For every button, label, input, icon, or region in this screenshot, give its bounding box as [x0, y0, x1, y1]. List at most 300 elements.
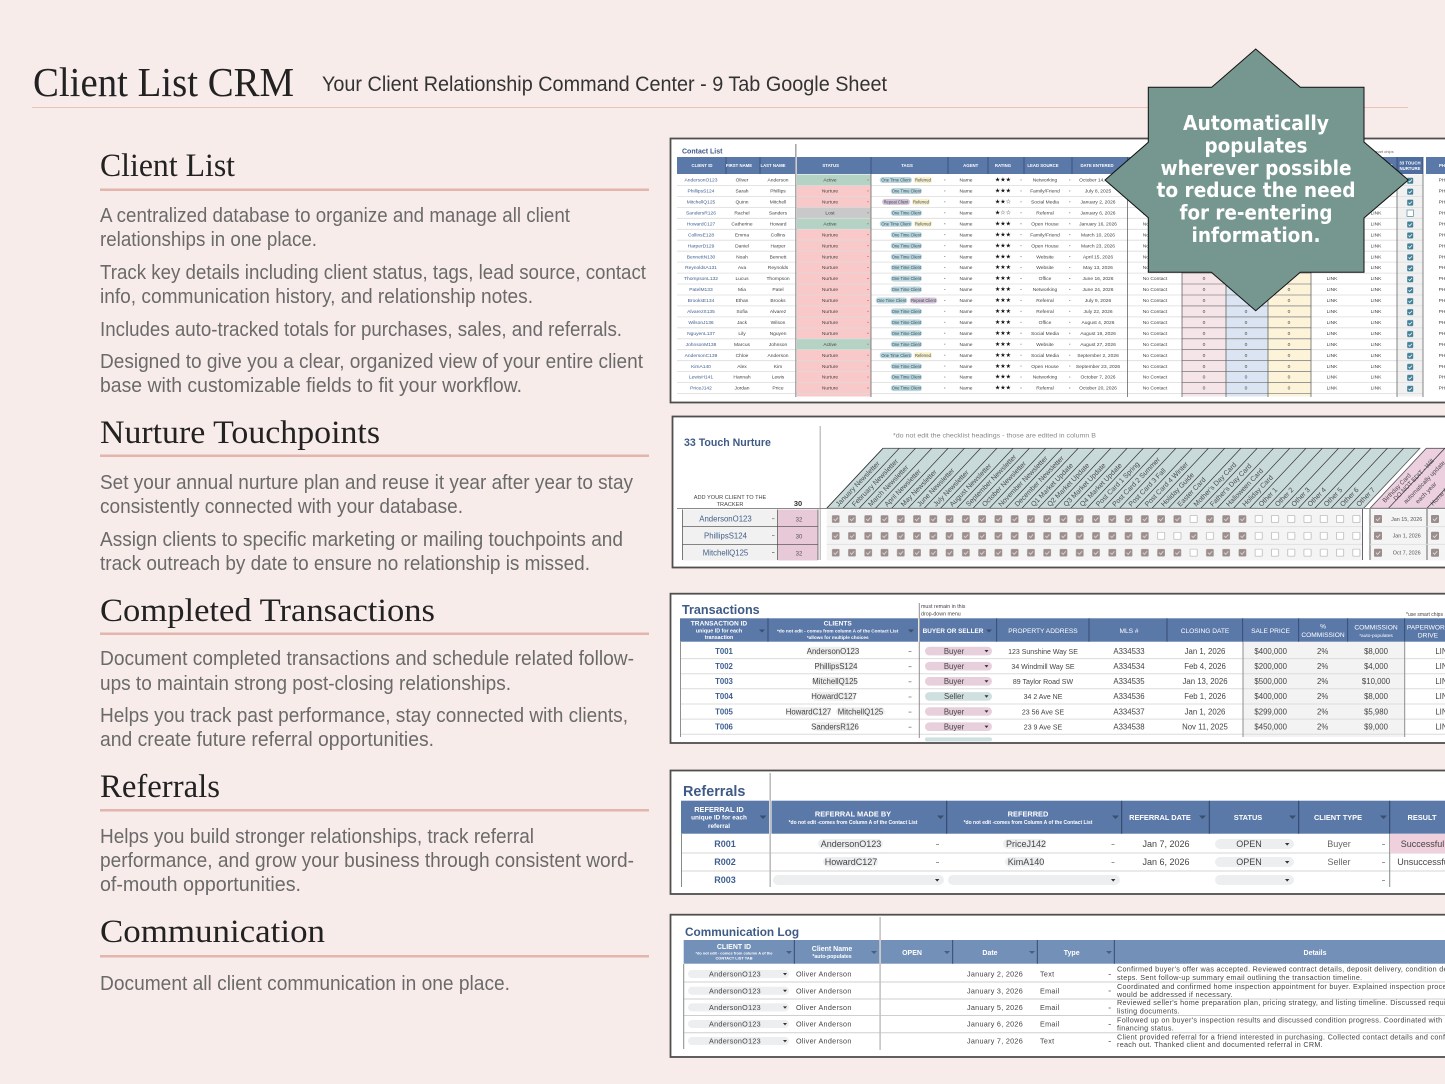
row: ReynoldsA131: ★★★ [995, 264, 1011, 271]
client pills [786, 647, 885, 731]
header row: *auto-populates [1359, 633, 1393, 639]
row: PhillipsS124: PhillipsS124 [688, 189, 715, 195]
slanted touchpoint labels: Other 1 [1258, 487, 1279, 508]
slanted touchpoint labels: Other 4 [1307, 487, 1328, 508]
row: T002: Feb 4, 2026 [1184, 662, 1226, 671]
row: BrooksE134: LINK [1327, 298, 1338, 304]
row: T002: $4,000 [1364, 662, 1389, 671]
frozen column divider [769, 773, 771, 887]
header row [677, 157, 1445, 174]
row: BrooksE134: Brooks [770, 298, 786, 304]
row: ThompsonL132: No Contact [1143, 276, 1168, 282]
header row: RATING [995, 163, 1012, 168]
header row: COMMISSION [1301, 632, 1345, 639]
slanted touchpoint labels: Other 2 [1274, 487, 1296, 508]
column dividers [871, 174, 1423, 397]
row: T001: $400,000 [1254, 647, 1288, 656]
row: T004: T004 [715, 692, 734, 701]
row: AndersonC139: LINK [1327, 353, 1338, 359]
row: ReynoldsA131: LINK [1327, 265, 1338, 271]
row: JohnsonM138: ★★★ [995, 341, 1011, 348]
row: HowardC127: Referred [915, 221, 932, 226]
header [32, 59, 1408, 108]
header row: REFERRAL MADE BY [815, 810, 891, 818]
row: MitchellQ125: ★★☆ [995, 198, 1011, 206]
slanted touchpoint labels: Holiday Card [1242, 474, 1275, 508]
row: JohnsonM138: 0 [1245, 342, 1248, 348]
row: PriceJ142: No Contact [1143, 386, 1168, 392]
body text: info, communication history, and relationship notes. [100, 286, 533, 308]
row: January 3: AndersonO123 [709, 986, 761, 995]
heading rule [100, 955, 649, 958]
row: CollinsE128: ★★★ [995, 231, 1011, 238]
body text: relationships in one place. [100, 229, 317, 251]
row: NguyenL137: NguyenL137 [687, 331, 715, 337]
row: ThompsonL132: LINK [1371, 276, 1382, 282]
row: January 3: January 3, 2026 [967, 986, 1023, 995]
row: WilsonJ136: No Contact [1143, 320, 1168, 326]
row: ThompsonL132: Lucus [735, 276, 749, 282]
row: ThompsonL132: Thompson [766, 276, 790, 282]
row: PatelM133: Mia [738, 287, 746, 293]
row: MitchellQ125: 0 [1203, 200, 1206, 206]
body text: ups to maintain strong post-closing relationships. [100, 673, 511, 695]
row: ThompsonL132: LINK [1327, 276, 1338, 282]
row: SandersR126: 0 [1288, 210, 1291, 216]
sheet title: Transactions: Transactions [682, 603, 760, 617]
sheet title: Contact List: Contact List [682, 148, 723, 156]
header row: LAST CONTACT [1359, 163, 1393, 168]
row: NguyenL137: 0 [1245, 331, 1248, 337]
header row: COMMISSION [1354, 624, 1398, 632]
row: T005 [715, 707, 1445, 716]
callout text: Automatically [1183, 111, 1329, 135]
row: NguyenL137: One Time Client [892, 331, 922, 336]
slanted touchpoint labels: Mother's Day Card [1193, 462, 1238, 508]
body text: track outreach by date to ensure no relationship is missed. [100, 553, 590, 575]
header row [684, 940, 1445, 964]
row: LewisH141: 0 [1203, 375, 1206, 381]
row: AndersonO123: Oliver [736, 178, 749, 184]
row: BennettN130: Website [1036, 254, 1054, 260]
row: WilsonJ136: WilsonJ136 [688, 320, 714, 326]
row: AndersonC139: 0 [1288, 353, 1291, 359]
header row: REFERRAL DATE [1129, 813, 1191, 822]
row: January 6: financing status. [1117, 1024, 1174, 1033]
row: AndersonC139 [685, 352, 1445, 359]
row: HowardC127: Open House [1031, 221, 1059, 227]
row: NguyenL137: August 19, 2026 [1080, 331, 1116, 337]
row: BrooksE134: Referral [1036, 298, 1054, 304]
row: T005: T005 [715, 707, 734, 716]
dropdown marks [935, 843, 1289, 882]
row: LewisH141: LewisH141 [689, 375, 713, 381]
row: BrooksE134: 0 [1245, 298, 1248, 304]
row: LewisH141: Nurture [822, 375, 838, 381]
row: T005: 23 56 Ave SE [1022, 709, 1064, 716]
row: T002: 34 Windmill Way SE [1011, 664, 1075, 671]
row: PatelM133: One Time Client [892, 287, 922, 292]
row: AndersonC139: September 2, 2026 [1077, 353, 1119, 359]
row: T002: PhillipsS124 [815, 662, 858, 671]
header row: *auto-populates [812, 954, 852, 960]
row: BennettN130: Bennett [770, 254, 787, 260]
slanted touchpoint labels: Post Card 1 Spring [1095, 461, 1141, 508]
row: LewisH141: LINK [1327, 375, 1338, 381]
row: WilsonJ136: Nurture [822, 320, 838, 326]
header row: Client Name [812, 946, 852, 953]
row: LewisH141: ★★★ [995, 374, 1011, 381]
row: WilsonJ136: 0 [1288, 320, 1291, 326]
body text: consistently connected with your database. [100, 496, 463, 518]
text section: Referrals [100, 769, 649, 896]
heading rule [100, 454, 649, 457]
row: KimA140: KimA140 [691, 364, 711, 370]
row: T005: 2% [1317, 707, 1328, 716]
slanted touchpoint labels: Q2 Market Update [1046, 462, 1091, 508]
row: AndersonO123: No Contact [1143, 178, 1168, 184]
row: January 5 [709, 998, 1445, 1016]
birthday date column: Jan 15, 2026 [1391, 517, 1422, 523]
header row: unique ID for each [691, 815, 747, 822]
row: JohnsonM138: August 27, 2026 [1080, 342, 1116, 348]
body text [100, 826, 634, 896]
result cell: successful [1390, 834, 1445, 853]
header row: Type [1064, 950, 1080, 957]
row: HowardC127: January 16, 2026 [1079, 221, 1117, 227]
pink birthday header band [1370, 448, 1445, 508]
row: T002: $200,000 [1254, 662, 1288, 671]
row: ThompsonL132: 0 [1288, 276, 1291, 282]
header row: FIRST NAME [726, 163, 752, 168]
client rows: PhillipsS124 [704, 532, 748, 540]
row: KimA140 [691, 363, 1445, 370]
row: AndersonO123: Anderson [768, 178, 789, 184]
row: KimA140: 0 [1203, 364, 1206, 370]
client dropdown marks [908, 651, 912, 731]
sheet title: Communication Log: Communication Log [685, 925, 799, 939]
row: PriceJ142: Name [959, 386, 973, 392]
header row: Details [1304, 950, 1327, 957]
row: ReynoldsA131: 0 [1288, 265, 1291, 271]
row: PhillipsS124: Phillips [770, 189, 786, 195]
row: BennettN130 [687, 253, 1445, 260]
row: SandersR126: LINK [1327, 210, 1338, 216]
callout text [1156, 111, 1356, 247]
row: ReynoldsA131: ReynoldsA131 [685, 265, 717, 271]
row: NguyenL137: 0 [1203, 331, 1206, 337]
row: T003: 2% [1317, 677, 1328, 686]
row: R001 [714, 839, 1444, 849]
slanted touchpoint labels: Post Card 3 Fall [1128, 467, 1168, 508]
row: HarperD129: Open House [1031, 243, 1059, 249]
client rows: MitchellQ125 [703, 548, 749, 558]
row: ReynoldsA131: 0 [1203, 265, 1206, 271]
row: LewisH141: Networking [1033, 375, 1058, 381]
heading rule [100, 632, 649, 635]
pills [773, 839, 1294, 885]
row: MitchellQ125: Referred [913, 200, 930, 204]
note: smart chips: *use smart chips [1364, 149, 1394, 154]
header row: CLIENT ID [691, 163, 713, 168]
row: JohnsonM138: One Time Client [892, 342, 922, 347]
totals column fills [1182, 174, 1423, 396]
row: SandersR126: Name [959, 210, 973, 216]
row: PhillipsS124: July 8, 2025 [1085, 189, 1111, 195]
header row: AGENT [963, 163, 979, 168]
row: JohnsonM138: LINK [1371, 342, 1382, 348]
count: 30: 30 [794, 499, 802, 508]
heading rule [100, 809, 649, 812]
row: KimA140: Alex [737, 364, 747, 370]
row: January 3: Oliver Anderson [796, 986, 852, 995]
row: AndersonC139: ★★★ [995, 352, 1011, 359]
row: BennettN130: BennettN130 [687, 254, 716, 260]
row: R002 [714, 857, 1445, 867]
header row: LAST NAME [760, 163, 786, 168]
row: NguyenL137: No Contact [1143, 331, 1168, 337]
row: WilsonJ136: ★★★ [995, 319, 1011, 326]
row: LewisH141: Hannah [733, 375, 751, 381]
row: PriceJ142: PriceJ142 [690, 386, 712, 392]
row: T003: Jan 13, 2026 [1182, 677, 1228, 686]
row: AlvarezS135: 0 [1288, 309, 1291, 315]
row: CollinsE128: CollinsE128 [688, 232, 714, 238]
header row: CLIENT TYPE [1314, 813, 1362, 822]
slanted touchpoint labels: Other 3 [1291, 487, 1312, 508]
row: January 7: reach out. Thanked client and documented referral in CRM. [1117, 1040, 1323, 1049]
row: JohnsonM138: Marcus [734, 342, 751, 348]
heading: Communication: Communication [100, 914, 325, 950]
row: AlvarezS135: No Contact [1143, 309, 1168, 315]
dropdown marks [868, 180, 1070, 391]
row: NguyenL137: LINK [1327, 331, 1338, 337]
row: MitchellQ125: January 2, 2026 [1080, 200, 1116, 206]
row: JohnsonM138: JohnsonM138 [686, 342, 717, 348]
row: AlvarezS135: 0 [1245, 309, 1248, 315]
row: KimA140: LINK [1327, 364, 1338, 370]
slanted touchpoint labels: Q4 Market Update [1079, 462, 1124, 508]
row: BrooksE134 [688, 297, 1445, 304]
row: NguyenL137: Lily [738, 331, 746, 337]
row: AndersonO123: 0 [1203, 178, 1206, 184]
slanted touchpoint labels: April Newsletter [884, 468, 923, 508]
row: T005: Buyer [944, 707, 965, 716]
callout text: for re-entering [1180, 201, 1332, 225]
row: JohnsonM138: Website [1036, 342, 1054, 348]
row: ThompsonL132: Office [1039, 276, 1052, 282]
row: January 6: AndersonO123 [709, 1020, 761, 1029]
row: BrooksE134: ★★★ [995, 297, 1011, 304]
body text: of-mouth opportunities. [100, 874, 301, 896]
row: BennettN130: Nurture [822, 254, 838, 260]
row: T003 [715, 677, 1445, 686]
row: January 2: steps. Sent follow-up summary email outlining the transaction timeline. [1117, 973, 1362, 982]
row: AndersonO123: Networking [1033, 178, 1058, 184]
row: PriceJ142: LINK [1371, 386, 1382, 392]
row: January 7 [709, 1032, 1445, 1049]
referral rows [714, 839, 1445, 885]
row: MitchellQ125: 0 [1245, 200, 1248, 206]
slanted touchpoint labels: January Newsletter [835, 460, 882, 508]
row: LewisH141: Lewis [772, 375, 785, 381]
body text [100, 648, 634, 751]
row: HarperD129 [688, 242, 1445, 249]
row: HarperD129: One Time Client [892, 243, 922, 248]
slanted touchpoint labels [835, 453, 1377, 508]
row: ReynoldsA131: May 13, 2026 [1083, 265, 1113, 271]
row: PatelM133: Patel [772, 287, 784, 293]
slanted touchpoint labels: November Newsletter [998, 455, 1050, 508]
slanted touchpoint labels: Holiday Guide [1160, 472, 1196, 508]
row: R001: Successful [1401, 839, 1444, 849]
client rows: 32 [796, 518, 803, 524]
row: T004: Seller [944, 692, 964, 701]
row: T003: T003 [715, 677, 734, 686]
row: AndersonO123: 0 [1245, 178, 1248, 184]
row: AlvarezS135: Referral [1036, 309, 1054, 315]
slanted touchpoint labels: Other 6 [1339, 487, 1361, 508]
row: T006: 2% [1317, 722, 1328, 732]
row: AlvarezS135: LINK [1327, 309, 1338, 315]
row: T006: A334538 [1113, 722, 1145, 732]
row: JohnsonM138: Johnson [769, 342, 788, 348]
transaction rows [715, 647, 1445, 732]
row: R003: R003 [714, 875, 736, 885]
header row: RESULT [1407, 813, 1437, 822]
header row: referral [708, 823, 730, 830]
row: HarperD129: 0 [1288, 243, 1291, 249]
row: AndersonC139: Name [959, 353, 973, 359]
row: PriceJ142: Price [772, 386, 784, 392]
row: NguyenL137: Social Media [1031, 331, 1059, 337]
row: T004: $400,000 [1254, 692, 1288, 701]
row: BrooksE134: 0 [1203, 298, 1206, 304]
note: drop-down menu [921, 604, 966, 618]
slanted touchpoint labels: December Newsletter [1014, 455, 1066, 508]
header row: NURTURE [1399, 166, 1421, 171]
row lines [677, 186, 1423, 394]
row: T004: Feb 1, 2026 [1184, 692, 1226, 701]
frozen and column lines [682, 834, 1390, 887]
heading: Completed Transactions: Completed Transactions [100, 593, 435, 629]
row: KimA140: Open House [1031, 364, 1059, 370]
row: ReynoldsA131: One Time Client [892, 265, 922, 270]
row: HowardC127: HowardC127 [687, 221, 716, 227]
header row: SALE PRICE [1251, 628, 1291, 635]
row: SandersR126: ★☆☆ [995, 210, 1011, 216]
slanted touchpoint labels: Post Card 4 Winter [1144, 461, 1191, 508]
slanted touchpoint labels: February Newsletter [851, 458, 900, 508]
row: HarperD129: HarperD129 [688, 243, 715, 249]
row: SandersR126: Lost [825, 210, 835, 216]
row: T004: A334536 [1113, 692, 1145, 701]
row: January 5: January 5, 2026 [967, 1003, 1023, 1012]
row: PhillipsS124: Sarah [735, 189, 749, 195]
row: PriceJ142: One Time Client [892, 386, 922, 391]
row: HowardC127: Name [959, 221, 973, 227]
row: JohnsonM138: Name [959, 342, 973, 348]
body text: performance, and grow your business through consistent word- [100, 850, 634, 872]
row: T004: $8,000 [1364, 692, 1389, 701]
row: PatelM133: Nurture [822, 287, 838, 293]
slanted touchpoint labels: March Newsletter [867, 464, 911, 508]
body text: Helps you build stronger relationships, track referral [100, 826, 534, 848]
row: AndersonC139: Chloe [736, 353, 749, 359]
row: WilsonJ136: 0 [1203, 320, 1206, 326]
row: January 6 [709, 1015, 1445, 1033]
row: R001: AndersonO123 [821, 839, 881, 849]
row: T002: A334534 [1113, 662, 1145, 671]
row: January 2: Oliver Anderson [796, 970, 852, 979]
row: SandersR126: Sanders [769, 210, 788, 216]
row: AndersonC139: LINK [1371, 353, 1382, 359]
row: R002: Seller [1327, 857, 1351, 867]
row: MitchellQ125: Nurture [822, 200, 838, 206]
row: T006 [715, 722, 1445, 732]
row: January 6: Email [1040, 1020, 1060, 1029]
slanted touchpoint labels: Q3 Market Update [1063, 462, 1108, 508]
row: T005: MitchellQ125 [838, 707, 884, 716]
client rows [682, 510, 818, 560]
body text [100, 472, 633, 575]
row: PriceJ142: 0 [1288, 386, 1291, 392]
row: PhillipsS124: No Contact [1143, 189, 1168, 195]
row: T001: 2% [1317, 647, 1328, 656]
row: HowardC127: Active [823, 221, 837, 227]
header row: CLOSING DATE [1181, 628, 1230, 635]
heading rule [100, 188, 649, 191]
header row: *do not edit - comes from column A of the Contact List [777, 628, 899, 634]
row: KimA140: ★★★ [995, 363, 1011, 370]
row: NguyenL137: Nurture [822, 331, 838, 337]
row: T001: A334533 [1113, 647, 1145, 656]
row: WilsonJ136: 0 [1245, 320, 1248, 326]
slanted touchpoint labels: Easter Card [1177, 477, 1208, 508]
row: ThompsonL132: Name [959, 276, 973, 282]
row: January 5: Oliver Anderson [796, 1003, 852, 1012]
row: HarperD129: Nurture [822, 243, 838, 249]
header row: BUYER OR SELLER [923, 628, 984, 635]
row: AndersonC139: Referred [915, 353, 932, 358]
row: CollinsE128: No Contact [1143, 232, 1168, 238]
row: PriceJ142: Nurture [822, 386, 838, 392]
row lines [681, 853, 1445, 871]
row: LewisH141: 0 [1288, 375, 1291, 381]
row: CollinsE128: 0 [1245, 232, 1248, 238]
row: January 5: AndersonO123 [709, 1003, 761, 1012]
body text: A centralized database to organize and manage all client [100, 205, 570, 227]
body text: Set your annual nurture plan and reuse it year after year to stay [100, 472, 633, 494]
row: January 6: January 6, 2026 [967, 1020, 1023, 1029]
row: AlvarezS135: July 22, 2026 [1083, 309, 1113, 315]
row: KimA140: 0 [1245, 364, 1248, 370]
header row: TAGS [901, 163, 913, 168]
row: HarperD129: 0 [1245, 243, 1248, 249]
row: NguyenL137: Nguyen [770, 331, 787, 337]
body text: base with customizable fields to fit your workflow. [100, 375, 522, 397]
row: T004: 34 2 Ave NE [1024, 694, 1063, 701]
row: BennettN130: LINK [1371, 254, 1382, 260]
row: HowardC127: No Contact [1143, 221, 1168, 227]
row: AndersonO123: LINK [1327, 178, 1338, 184]
row: T001: AndersonO123 [807, 647, 859, 656]
row: January 3 [709, 982, 1445, 999]
row: CollinsE128: Collins [771, 232, 786, 238]
row: ReynoldsA131: Name [959, 265, 973, 271]
star shape [1105, 49, 1408, 311]
body text: Assign clients to specific marketing or mailing touchpoints and [100, 529, 623, 551]
